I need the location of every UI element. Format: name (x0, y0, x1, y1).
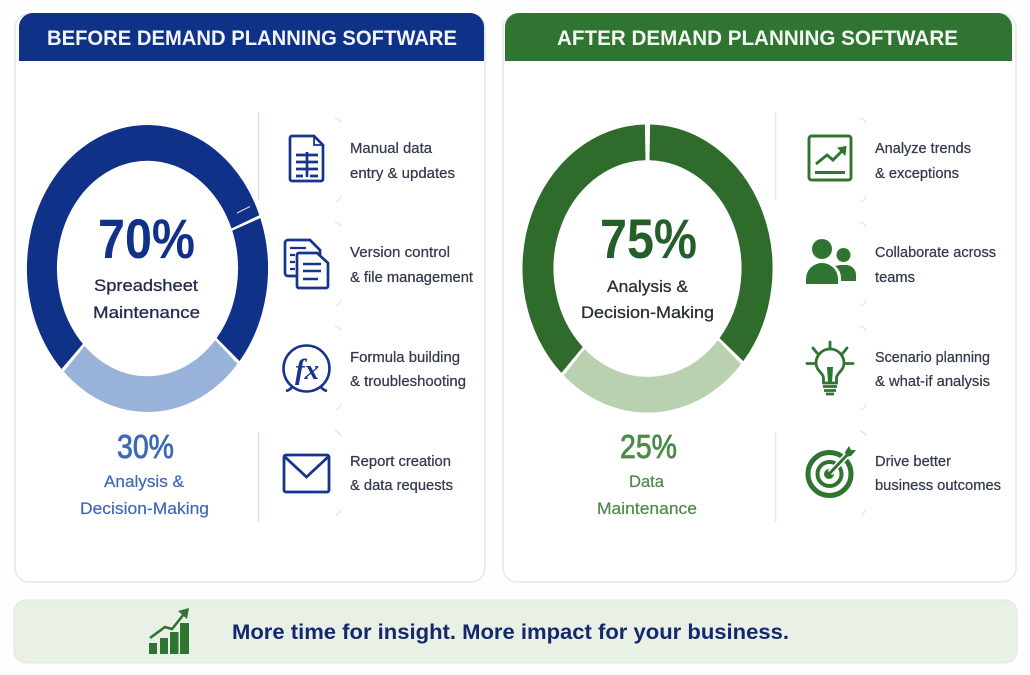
icon: formula: fx (295, 354, 319, 386)
text: manual data entry: Manual data (350, 140, 433, 157)
icon: growth chart (149, 608, 189, 654)
text: collaborate across teams: teams (875, 269, 915, 286)
text: drive better outcomes (875, 453, 1001, 494)
text: analyze trends: & exceptions (875, 165, 959, 182)
icon: stacked files (285, 240, 328, 288)
donut secondary value: 30 percent (80, 428, 209, 518)
donut main value: 70 percent: Spreadsheet (94, 276, 198, 295)
header bar: after: AFTER DEMAND PLANNING SOFTWARE (557, 27, 958, 50)
tagline: More time for insight. More impact for your business. (232, 621, 789, 644)
text: scenario planning: & what-if analysis (875, 373, 990, 390)
donut main value: 75 percent: Decision-Making (581, 303, 714, 322)
text: version control: Version control (350, 244, 450, 261)
text: scenario planning: Scenario planning (875, 349, 990, 366)
donut main value: 75 percent: 75% (600, 207, 697, 270)
donut secondary value: 25 percent: Maintenance (597, 499, 697, 518)
icon: envelope (284, 455, 329, 492)
text: scenario planning (875, 349, 990, 390)
header bar: before: BEFORE DEMAND PLANNING SOFTWARE (47, 27, 457, 50)
text: drive better outcomes: business outcomes (875, 477, 1001, 494)
donut main value: 75 percent (581, 207, 714, 322)
icon: trend chart (809, 136, 851, 180)
donut main value: 75 percent: Analysis & (607, 277, 689, 296)
icon: target (808, 446, 856, 496)
panel: after demand planning software (503, 13, 1016, 582)
icon: formula (284, 346, 330, 392)
donut secondary value: 25 percent: 25% (620, 428, 677, 465)
text: formula building: Formula building (350, 349, 460, 366)
donut secondary value: 30 percent: Decision-Making (80, 499, 209, 518)
donut secondary value: 30 percent: 30% (117, 428, 174, 465)
donut main value: 70 percent (93, 207, 200, 322)
text: report creation (350, 453, 453, 494)
footer banner (14, 600, 1017, 663)
text: report creation: Report creation (350, 453, 451, 470)
text: formula building: & troubleshooting (350, 373, 466, 390)
text: report creation: & data requests (350, 477, 453, 494)
text: analyze trends: Analyze trends (875, 140, 971, 157)
donut secondary value: 25 percent (597, 428, 697, 518)
icon: people (806, 239, 856, 284)
icon: data document (290, 136, 323, 181)
donut main value: 70 percent: Maintenance (93, 303, 200, 322)
text: manual data entry (350, 140, 455, 182)
icon: lightbulb (807, 342, 853, 394)
header bar: before (19, 13, 484, 61)
donut main value: 70 percent: 70% (98, 207, 195, 270)
donut secondary value: 25 percent: Data (629, 472, 665, 491)
text: formula building (350, 349, 466, 390)
text: collaborate across teams: Collaborate across (875, 244, 996, 261)
donut chart: before (42, 143, 253, 394)
text: analyze trends (875, 140, 971, 182)
text: drive better outcomes: Drive better (875, 453, 951, 470)
donut chart: after (538, 142, 757, 395)
text: version control: & file management (350, 269, 474, 286)
header bar: after (505, 13, 1012, 61)
text: manual data entry: entry & updates (350, 165, 455, 182)
donut secondary value: 30 percent: Analysis & (104, 472, 185, 491)
text: version control (350, 244, 474, 286)
text: collaborate across teams (875, 244, 996, 286)
panel: before demand planning software (15, 13, 485, 582)
